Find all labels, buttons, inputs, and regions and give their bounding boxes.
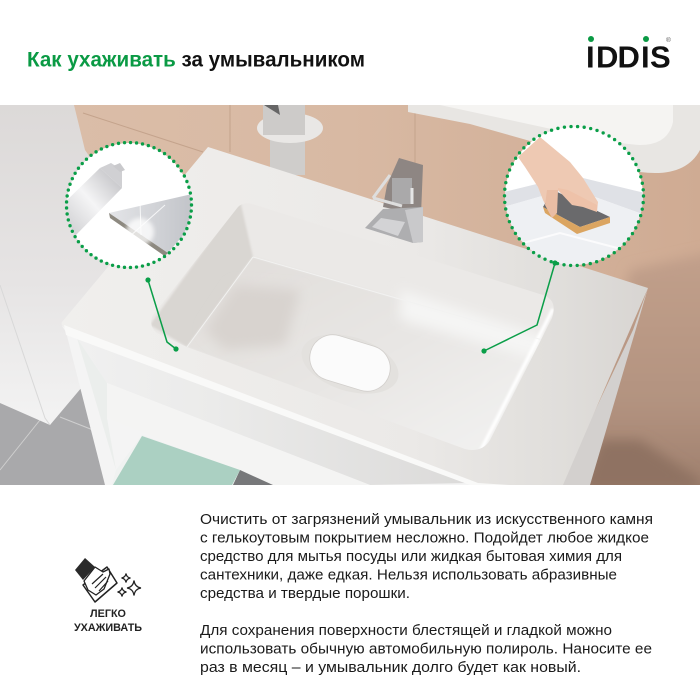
fingers over sponge [558, 188, 597, 212]
basin reflection [210, 287, 297, 350]
left cabinet [0, 105, 120, 425]
basin [152, 204, 554, 450]
spray can [62, 168, 122, 236]
counter front lip [64, 325, 510, 485]
interior [112, 435, 273, 485]
vanity leg and interior [62, 326, 470, 485]
text block 1: Очистить от загрязнений умывальник из искусственного камня [200, 511, 653, 528]
wall tile seams [83, 105, 416, 163]
cup holder [257, 105, 323, 175]
leader line left [145, 277, 179, 352]
text block 1: сантехники, даже едкая. Нельзя использовать абразивные [200, 566, 617, 584]
leader line right [481, 260, 558, 354]
shelf band under counter [169, 375, 464, 485]
icon label: ЛЕГКО [90, 608, 126, 620]
text block 2: раз в месяц – и умывальник долго будет как новый. [200, 659, 581, 676]
counter top side face [560, 288, 648, 485]
photo: washbasin [0, 105, 700, 500]
logo: IDDIS: IDDIS [586, 40, 671, 74]
basin floor [191, 258, 326, 348]
drain [309, 334, 398, 394]
drawer [107, 383, 370, 485]
text block 1: средство для мытья посуды или жидкая бытовая химия для [200, 548, 622, 565]
lower wall right [590, 256, 700, 485]
faucet [365, 158, 423, 243]
towel [113, 436, 240, 485]
icon label: УХАЖИВАТЬ [74, 622, 142, 634]
callout: spray polish [62, 142, 192, 268]
mirror [408, 105, 700, 173]
title: Как ухаживать за умывальником [27, 48, 365, 72]
hand [518, 137, 598, 218]
icon: glove and sparkles [75, 558, 141, 602]
logo: IDDIS: ® [666, 36, 671, 44]
metal plate [109, 194, 192, 253]
floor [0, 389, 105, 485]
text block 2: Для сохранения поверхности блестящей и гладкой можно [200, 622, 612, 639]
text block 2 [200, 622, 652, 676]
text block 2: использовать обычную автомобильную полироль. Наносите ее [200, 640, 652, 658]
text block 1: с гелькоутовым покрытием несложно. Подойдет любое жидкое [200, 530, 649, 546]
sink rim [500, 178, 645, 215]
text block 1: средства и твердые порошки. [200, 585, 410, 602]
text block 1 [200, 511, 653, 602]
sponge [543, 190, 610, 227]
callout: sponge cleaning [500, 126, 645, 270]
counter top [62, 147, 648, 485]
basin left wall [150, 200, 253, 347]
